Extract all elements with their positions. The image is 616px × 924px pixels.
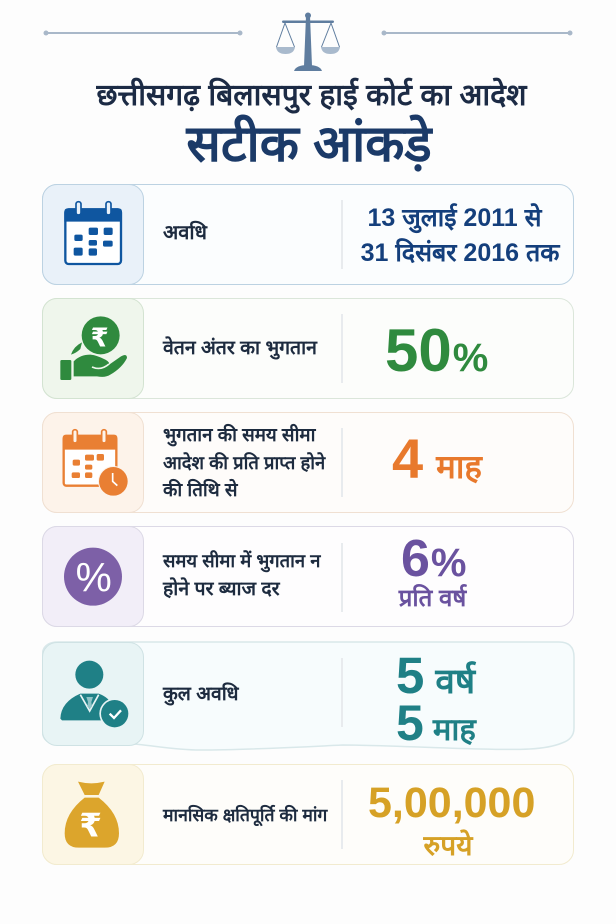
value: 6 percent per year: 6% — [401, 530, 466, 588]
label: payment deadline — [162, 424, 326, 500]
icon tile: total period — [42, 642, 144, 746]
value: 5 years 5 months: 5 वर्ष — [396, 647, 475, 704]
divider — [341, 543, 342, 612]
label: interest rate — [162, 550, 322, 600]
value: duration: 31 दिसंबर 2016 तक — [361, 239, 559, 267]
label: interest rate: समय सीमा में भुगतान न — [163, 550, 320, 571]
label: compensation: मानसिक क्षतिपूर्ति की मांग — [163, 805, 327, 825]
label: duration: अवधि — [163, 222, 207, 244]
panel: compensation — [42, 764, 574, 865]
icon: hand with rupee coin — [60, 316, 127, 380]
title line 1: छत्तीसगढ़ बिलासपुर हाई कोर्ट का आदेश — [96, 79, 527, 112]
icon: hand with rupee coin: ₹ — [90, 323, 108, 353]
value: 5 years 5 months: 5 माह — [396, 695, 476, 751]
panel: interest rate — [42, 526, 574, 627]
label: total period: कुल अवधि — [163, 684, 239, 705]
icon: blue calendar — [64, 200, 122, 266]
title line 2: सटीक आंकड़े — [186, 115, 432, 172]
label: payment deadline: आदेश की प्रति प्राप्त होने — [163, 452, 325, 472]
label: payment deadline: की तिथि से — [163, 479, 237, 500]
icon: person with check — [60, 660, 128, 728]
divider — [341, 428, 342, 497]
value: 5 years 5 months — [396, 647, 477, 751]
value: 6 percent per year: प्रति वर्ष — [399, 585, 466, 612]
value: duration — [361, 203, 560, 267]
value: 50 percent: 50% — [385, 317, 488, 384]
divider — [341, 658, 342, 727]
panel: duration — [42, 184, 574, 285]
value: duration: 13 जुलाई 2011 से — [367, 204, 542, 232]
icon: orange calendar with clock — [62, 428, 128, 496]
icon tile: compensation — [42, 764, 144, 865]
divider — [341, 200, 342, 269]
label: payment deadline: भुगतान की समय सीमा — [163, 424, 315, 445]
value: 4 months: 4 माह — [392, 427, 482, 490]
label: interest rate: होने पर ब्याज दर — [163, 578, 280, 600]
icon tile: interest rate — [42, 526, 144, 627]
icon: scales of justice — [276, 12, 340, 71]
value: 6 percent per year — [398, 530, 467, 612]
divider — [341, 780, 342, 849]
value: 5,00,000 rupees: 5,00,000 — [368, 779, 535, 827]
icon: money bag: ₹ — [80, 807, 102, 844]
label: salary difference: वेतन अंतर का भुगतान — [163, 337, 317, 359]
icon tile: duration — [42, 184, 144, 285]
icon: percent circle — [64, 548, 122, 606]
panel: salary difference — [42, 298, 574, 399]
header rule left — [44, 30, 242, 36]
header rule right — [382, 30, 572, 36]
divider — [341, 314, 342, 383]
icon tile: payment deadline — [42, 412, 144, 513]
icon tile: salary difference — [42, 298, 144, 399]
panel: payment deadline — [42, 412, 574, 513]
panel: total period — [42, 641, 575, 751]
icon: percent circle: % — [75, 555, 111, 601]
icon: money bag — [64, 782, 119, 848]
value: 5,00,000 rupees — [368, 779, 535, 861]
value: 5,00,000 rupees: रुपये — [424, 830, 472, 861]
